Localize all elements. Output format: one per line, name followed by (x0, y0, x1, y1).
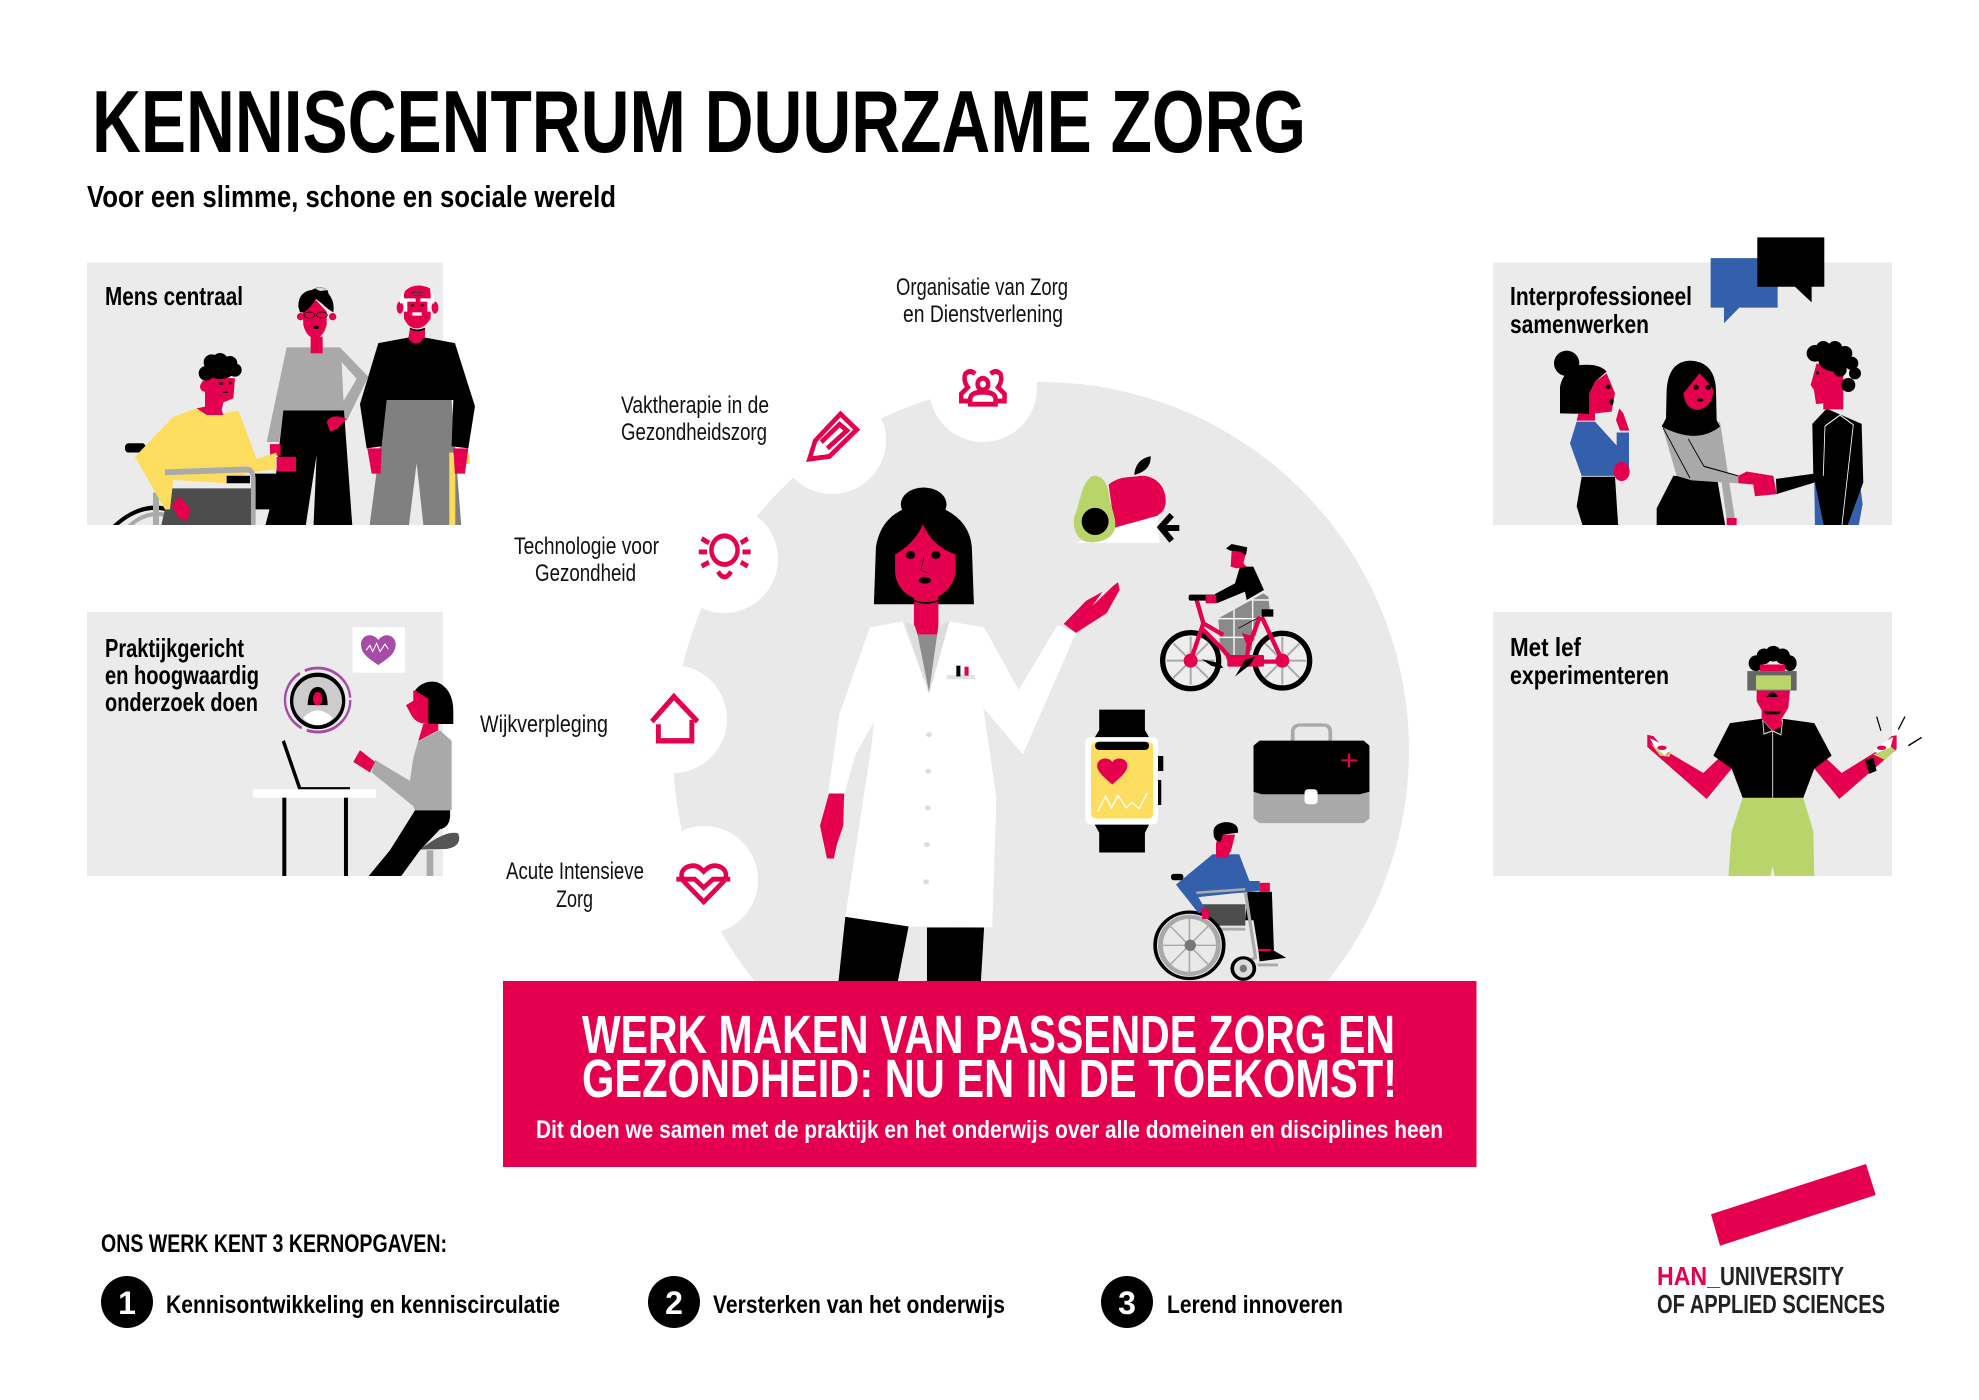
heading: mens centraal: Mens centraal (105, 281, 243, 311)
banner headline (582, 1005, 1397, 1109)
banner (503, 981, 1476, 1167)
heading: interprofessioneel samenwerken: samenwerken (1510, 309, 1649, 339)
icon: cyclist (1163, 544, 1310, 689)
heading: praktijkgericht onderzoek: Praktijkgericht (105, 633, 244, 663)
core task 1: 1 (118, 1285, 136, 1321)
heading: met lef experimenteren (1510, 632, 1669, 690)
discipline icons (652, 372, 1005, 902)
heads of the colleagues (1554, 341, 1861, 436)
panel: interprofessioneel samenwerken (1493, 237, 1892, 529)
icon: fruit (1074, 456, 1179, 543)
core task 2: 2 (665, 1285, 683, 1321)
icon: people (961, 372, 1005, 404)
icon: pencil (809, 414, 857, 459)
core task 3 (1101, 1276, 1343, 1328)
logo (1657, 1164, 1885, 1319)
banner headline: WERK MAKEN VAN PASSENDE ZORG EN (582, 1005, 1395, 1065)
subtitle: Voor een slimme, schone en sociale wereld (87, 179, 616, 214)
illustration: doctor (820, 487, 1120, 983)
heading: interprofessioneel samenwerken: Interprofessioneel (1510, 281, 1692, 311)
banner headline: GEZONDHEID: NU EN IN DE TOEKOMST! (582, 1049, 1397, 1109)
panel: met lef experimenteren (1493, 612, 1922, 877)
illustration: researcher at laptop (253, 627, 459, 878)
heading: praktijkgericht onderzoek: en hoogwaardig (105, 660, 259, 690)
core task 2 (648, 1276, 1005, 1328)
icon: wheelchair user (1155, 822, 1286, 979)
illustration: man with VR goggles (1647, 646, 1922, 877)
discipline labels: Gezondheidszorg (621, 419, 767, 446)
discipline labels: Acute Intensieve (506, 858, 644, 885)
core task 3: Lerend innoveren (1167, 1291, 1343, 1319)
central circle with discipline notches (619, 334, 1409, 1118)
panel: mens centraal (87, 262, 475, 530)
icon: medical bag (1254, 725, 1369, 823)
icon: light bulb (699, 536, 751, 577)
panel: praktijkgericht onderzoek (87, 612, 459, 878)
banner subtext: Dit doen we samen met de praktijk en het onderwijs over alle domeinen en disciplines heen (536, 1116, 1443, 1144)
logo: UNIVERSITY (1720, 1261, 1844, 1291)
discipline labels (480, 274, 1068, 913)
discipline labels: Organisatie van Zorg (896, 274, 1068, 301)
icon: smartwatch (1085, 710, 1163, 852)
logo: OF APPLIED SCIENCES (1657, 1289, 1885, 1319)
core task 1 (101, 1276, 560, 1328)
heading: praktijkgericht onderzoek (105, 633, 259, 717)
core task 1: Kennisontwikkeling en kenniscirculatie (166, 1291, 560, 1319)
discipline labels: Gezondheid (535, 560, 636, 587)
discipline labels: Vaktherapie in de (621, 392, 769, 419)
discipline labels: Technologie voor (514, 533, 659, 560)
icon: house (652, 697, 698, 741)
heading: interprofessioneel samenwerken (1510, 281, 1692, 339)
heading: praktijkgericht onderzoek: onderzoek doen (105, 687, 258, 717)
heading: met lef experimenteren: experimenteren (1510, 660, 1669, 690)
core tasks heading: ONS WERK KENT 3 KERNOPGAVEN: (101, 1230, 447, 1258)
logo: HAN_ (1657, 1261, 1720, 1291)
icon: speech bubbles (1711, 237, 1824, 323)
core task 3: 3 (1118, 1285, 1136, 1321)
title: KENNISCENTRUM DUURZAME ZORG (92, 72, 1306, 171)
heading: met lef experimenteren: Met lef (1510, 632, 1581, 662)
illustration: three colleagues shaking hands (1554, 341, 1863, 529)
core task 2: Versterken van het onderwijs (713, 1291, 1005, 1319)
discipline labels: Wijkverpleging (480, 711, 608, 738)
heads of the three people (197, 286, 438, 415)
icon: heart with pulse (676, 866, 730, 902)
illustration: three people (110, 286, 475, 530)
discipline labels: en Dienstverlening (903, 301, 1063, 328)
discipline labels: Zorg (556, 886, 593, 913)
